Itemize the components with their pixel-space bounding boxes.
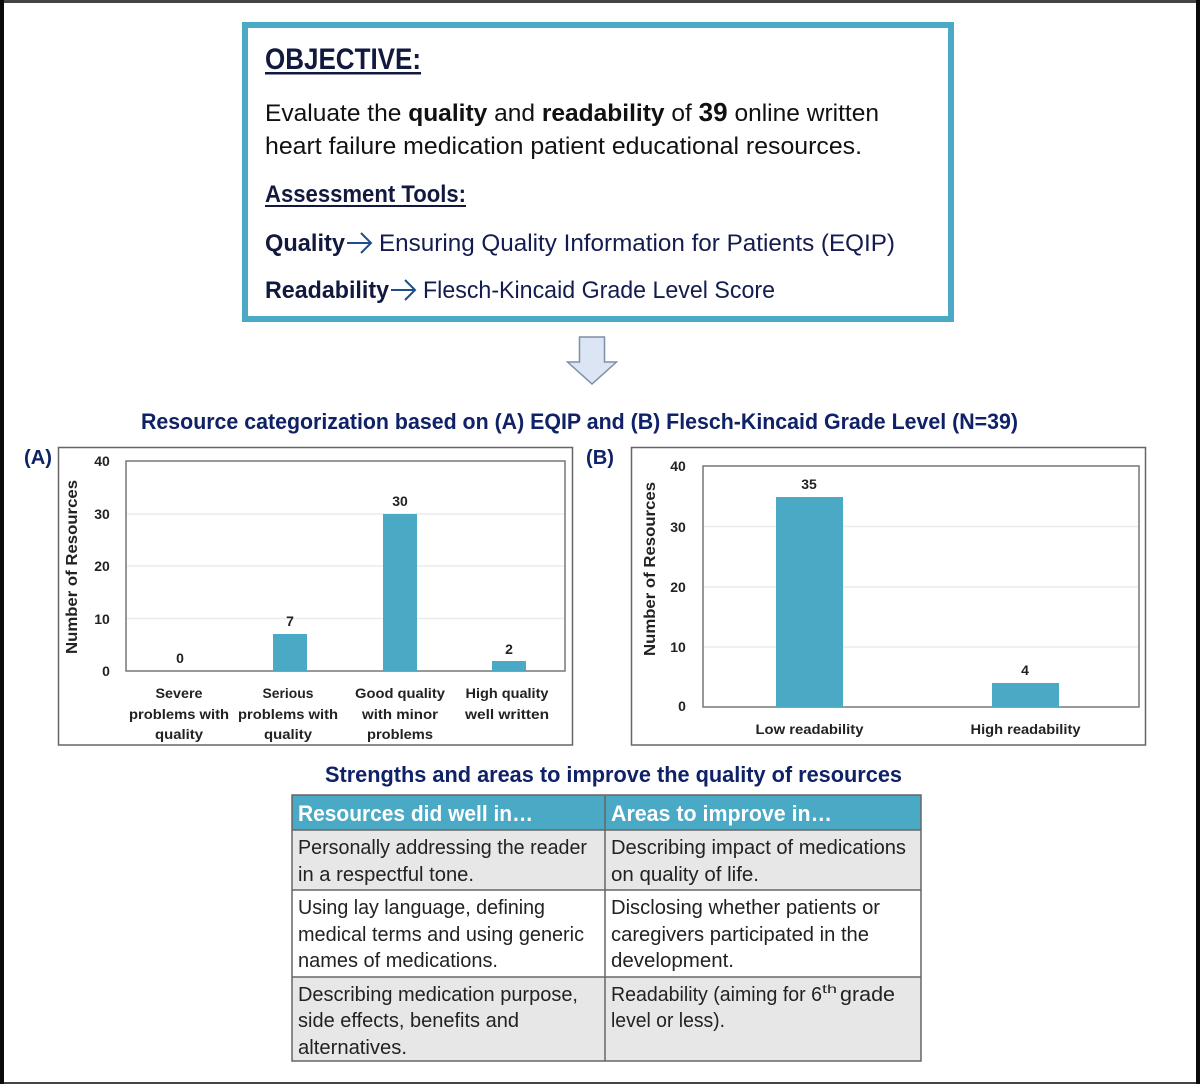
text: readability tool <box>265 277 775 304</box>
arrow: down <box>568 337 616 384</box>
category labels: quality <box>264 726 312 742</box>
row 2: Using lay language, defining <box>298 897 545 919</box>
bar value labels <box>801 476 1029 678</box>
text: quality tool: Quality <box>265 230 346 257</box>
row 3: grade <box>840 984 895 1006</box>
y axis ticks: 20 <box>670 579 686 595</box>
y axis title: Number of Resources <box>64 480 81 654</box>
row 1: Personally addressing the reader <box>298 837 587 859</box>
row 3: side effects, benefits and <box>298 1010 519 1032</box>
bars <box>273 514 526 671</box>
category labels: with minor <box>361 706 439 722</box>
category labels: Low readability <box>756 721 864 737</box>
heading: assessment tools: Assessment Tools: <box>265 181 466 208</box>
y axis ticks: 30 <box>670 519 686 535</box>
y axis ticks: 10 <box>670 639 686 655</box>
label: B: (B) <box>586 447 614 469</box>
y axis ticks: 40 <box>94 453 110 469</box>
row 3: th <box>822 982 837 996</box>
y axis ticks: 20 <box>94 558 110 574</box>
category labels: High readability <box>970 721 1081 737</box>
panel: objective <box>245 25 951 319</box>
bar value labels <box>176 493 513 666</box>
row 1: in a respectful tone. <box>298 864 474 886</box>
chart: Flesch-Kincaid categorization <box>632 448 1146 745</box>
category labels: problems <box>367 726 433 742</box>
bar value labels: 30 <box>392 493 408 509</box>
row 3: Readability (aiming for 6 <box>611 984 822 1006</box>
category labels <box>756 721 1081 737</box>
y axis ticks: 30 <box>94 506 110 522</box>
text: readability tool: Flesch-Kincaid Grade Level Score <box>423 277 775 304</box>
row 3 <box>298 982 895 1059</box>
y axis title: Number of Resources <box>642 482 659 656</box>
bar value labels: 7 <box>286 613 294 629</box>
y axis ticks: 0 <box>102 663 110 679</box>
bars <box>776 497 1059 707</box>
row 2: medical terms and using generic <box>298 924 584 946</box>
label: A: (A) <box>24 447 52 469</box>
bar value labels: 35 <box>801 476 817 492</box>
text: readability tool: Readability <box>265 277 390 304</box>
category labels: Severe <box>156 685 203 701</box>
chart: EQIP categorization <box>58 448 572 745</box>
y axis ticks: 40 <box>670 458 686 474</box>
row 1: on quality of life. <box>611 864 759 886</box>
table header: Resources did well in… <box>298 801 533 826</box>
row 1 <box>298 837 906 886</box>
heading: strengths and areas: Strengths and areas to improve the quality of resources <box>325 762 902 787</box>
category labels: High quality <box>466 685 549 701</box>
table header: Areas to improve in… <box>611 801 832 826</box>
text: objective description <box>265 97 879 160</box>
category labels: problems with <box>129 706 229 722</box>
text: objective description: heart failure medication patient educational resources. <box>265 133 862 160</box>
category labels: problems with <box>238 706 338 722</box>
category labels: well written <box>464 706 549 722</box>
bar value labels: 4 <box>1021 662 1029 678</box>
row 2: development. <box>611 950 734 972</box>
row 1: Describing impact of medications <box>611 837 906 859</box>
heading: objective: OBJECTIVE: <box>265 43 421 76</box>
row 3: level or less). <box>611 1010 725 1032</box>
row 2 <box>298 897 880 972</box>
table header <box>298 801 832 826</box>
row 3: Describing medication purpose, <box>298 984 578 1006</box>
text: objective description: Evaluate the quality and readability of 39 online written <box>265 97 879 127</box>
category labels: Serious <box>262 685 314 701</box>
row 2: Disclosing whether patients or <box>611 897 880 919</box>
bar value labels: 2 <box>505 641 513 657</box>
row 2: caregivers participated in the <box>611 924 869 946</box>
row 3: alternatives. <box>298 1037 407 1059</box>
y axis ticks: 10 <box>94 611 110 627</box>
text: quality tool: Ensuring Quality Information for Patients (EQIP) <box>379 230 895 257</box>
category labels: quality <box>155 726 203 742</box>
category labels <box>129 685 549 742</box>
table: strengths and improvements <box>292 795 921 1061</box>
heading: resource categorization: Resource categorization based on (A) EQIP and (B) Flesch-Kincaid Grade Level (N=39) <box>141 409 1018 434</box>
y axis ticks <box>94 453 110 679</box>
row 2: names of medications. <box>298 950 498 972</box>
bar value labels: 0 <box>176 650 184 666</box>
category labels: Good quality <box>355 685 445 701</box>
y axis ticks: 0 <box>678 698 686 714</box>
y axis ticks <box>670 458 686 714</box>
